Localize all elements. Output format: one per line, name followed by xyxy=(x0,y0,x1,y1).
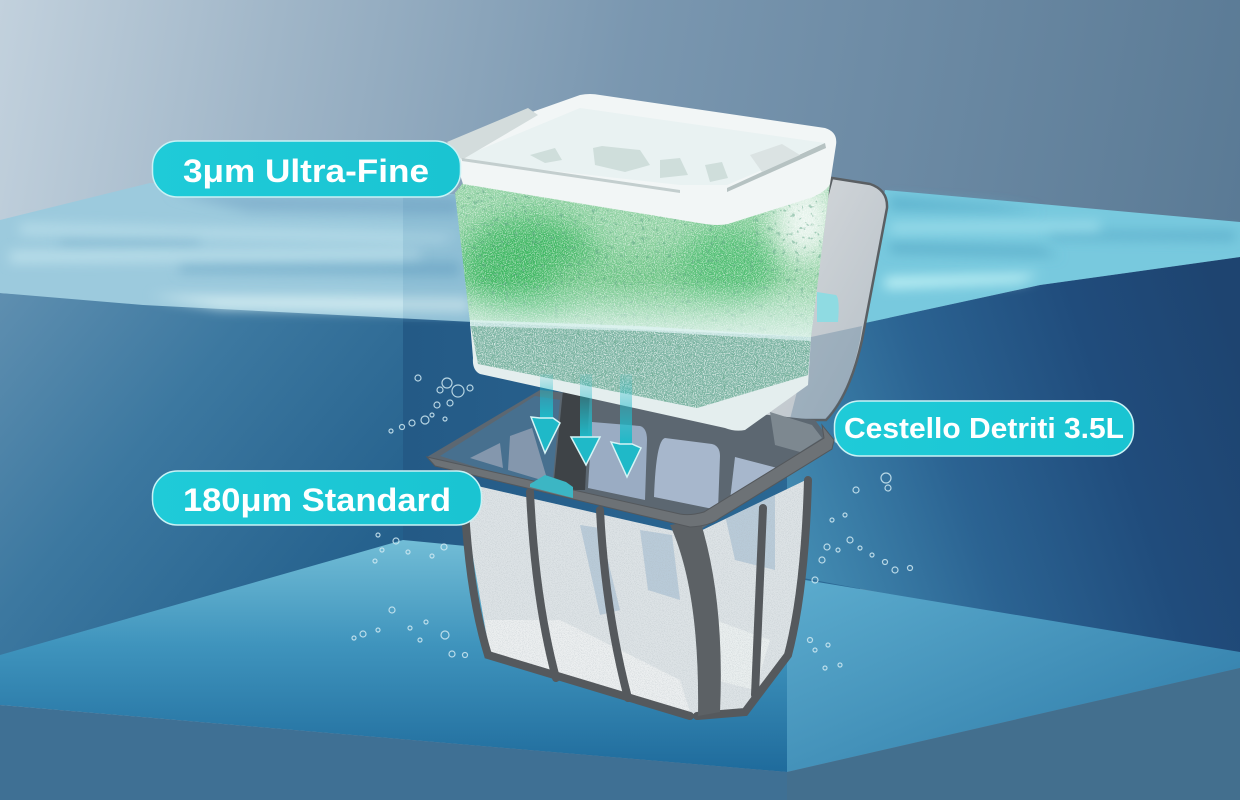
tank: inner debris xyxy=(530,146,728,182)
panel: water surface right xyxy=(865,190,1240,323)
tank: interior xyxy=(462,108,825,185)
tank: lower part under water xyxy=(465,320,815,431)
label: 180μm Standard: 180μm Standard xyxy=(183,482,451,518)
tank: green filter mesh xyxy=(455,183,830,337)
arrow: middle xyxy=(571,374,600,465)
basket: mesh body xyxy=(470,481,804,714)
basket: interior and rear panes xyxy=(427,390,832,530)
basket lid xyxy=(760,178,887,420)
label: 3μm Ultra-Fine: 3μm Ultra-Fine xyxy=(183,153,429,189)
arrow: right xyxy=(611,374,641,477)
bubbles: right cluster xyxy=(808,437,912,670)
basket: ribs xyxy=(464,480,808,716)
tank: side clips xyxy=(447,108,826,193)
label: Cestello Detriti 3.5L: Cestello Detriti 3.5L xyxy=(844,413,1124,445)
basket: teal clip xyxy=(530,475,573,498)
water line across tank xyxy=(470,320,811,341)
label: Cestello Detriti 3.5L xyxy=(834,401,1134,456)
tank: white collar xyxy=(452,94,836,225)
basket: front rim xyxy=(427,425,834,527)
label: 3μm Ultra-Fine xyxy=(152,141,460,197)
basket: corner post xyxy=(670,520,721,716)
label: 180μm Standard xyxy=(152,471,482,525)
panel: underwater walls xyxy=(0,257,1240,660)
arrow: left xyxy=(531,374,560,453)
lid below the waterline xyxy=(790,326,862,419)
bubbles: left cluster xyxy=(352,375,473,658)
panel: water surface left xyxy=(0,183,473,322)
panel: pool floor xyxy=(0,540,1240,800)
tab on lid xyxy=(817,292,839,322)
